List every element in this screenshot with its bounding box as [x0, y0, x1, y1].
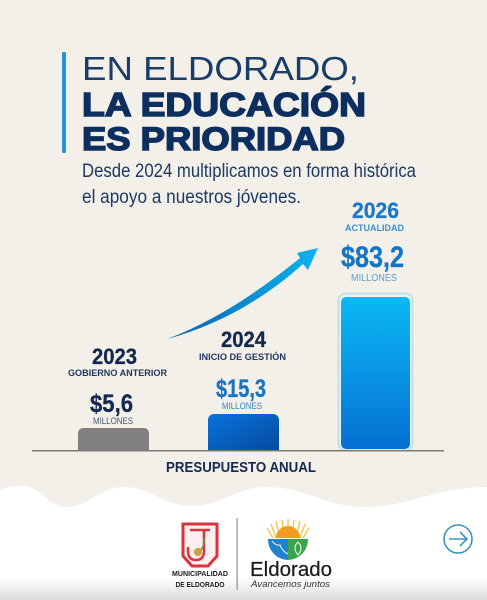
- chart baseline: [32, 450, 444, 452]
- title: LA EDUCACIÓN: [82, 86, 366, 123]
- label: 2026: ACTUALIDAD: [345, 223, 404, 234]
- label: 2026: 2026: [352, 198, 399, 223]
- label: 2024: $15,3: [216, 375, 266, 403]
- label: 2023: $5,6: [90, 390, 133, 418]
- label: 2026: MILLONES: [351, 273, 397, 284]
- bar: 2026: [338, 294, 412, 450]
- footer shadow strip: [0, 578, 487, 600]
- tagline: Avancemos juntos: [250, 579, 330, 590]
- label: 2024: MILLONES: [222, 401, 262, 411]
- label: 2026: [341, 198, 404, 284]
- municipal name: DE ELDORADO: [176, 582, 225, 589]
- label: 2023: 2023: [92, 344, 137, 369]
- growth arrow: [167, 248, 318, 339]
- icon: next arrow: [444, 525, 472, 553]
- municipal name: [172, 571, 228, 589]
- bar: 2023: [78, 428, 149, 450]
- title: EN ELDORADO,: [82, 51, 359, 88]
- subtitle: Desde 2024 multiplicamos en forma histórica: [82, 161, 416, 182]
- icon: red shield: [183, 524, 217, 566]
- label: 2024: [199, 327, 286, 411]
- label: 2024: INICIO DE GESTIÓN: [199, 351, 286, 362]
- divider: [236, 518, 238, 590]
- subtitle: [82, 161, 416, 208]
- label: 2023: [68, 344, 168, 426]
- title: ES PRIORIDAD: [82, 121, 345, 157]
- municipal name: MUNICIPALIDAD: [172, 571, 228, 578]
- heading accent bar: [62, 52, 66, 153]
- wordmark: Eldorado: [250, 559, 332, 581]
- subtitle: el apoyo a nuestros jóvenes.: [82, 187, 301, 208]
- label: 2026: $83,2: [341, 241, 404, 274]
- footer wave panel: [0, 486, 487, 600]
- bar: 2024: [208, 414, 279, 450]
- logo: eldorado avancemos juntos: [250, 519, 332, 590]
- icon: sun and landscape: [267, 519, 309, 560]
- axis label: PRESUPUESTO ANUAL: [166, 460, 316, 476]
- title: [82, 51, 366, 157]
- label: 2024: 2024: [221, 327, 267, 352]
- label: 2023: GOBIERNO ANTERIOR: [68, 368, 168, 378]
- logo: municipalidad de eldorado: [172, 524, 228, 589]
- label: 2023: MILLONES: [93, 416, 133, 426]
